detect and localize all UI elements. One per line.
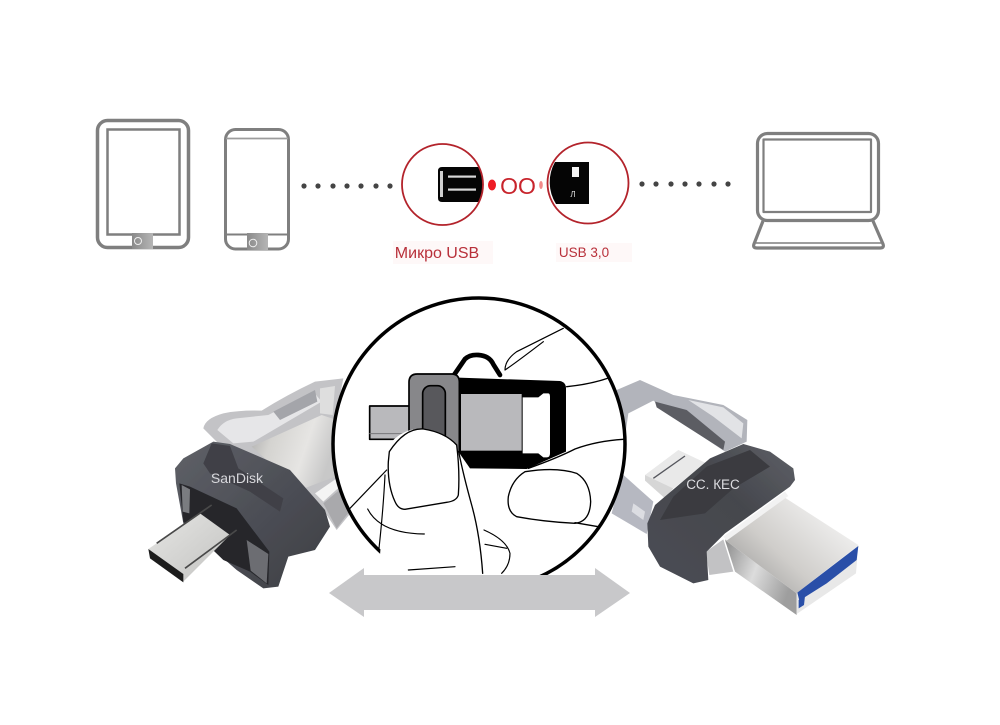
sliding loop	[454, 355, 500, 375]
micro USB connector	[148, 513, 230, 582]
grey slider cap	[409, 374, 459, 452]
transparent frame	[203, 378, 360, 530]
grey cap	[647, 444, 795, 583]
illustration: hand holding drive	[350, 328, 623, 575]
label: SS. KEC: СС. КЕС	[686, 477, 740, 492]
thumb	[380, 429, 418, 575]
thumb nail	[388, 429, 459, 509]
label: SanDisk: SanDisk	[211, 470, 264, 486]
icon: laptop	[754, 134, 883, 248]
micro USB connector	[645, 450, 707, 488]
icon: USB 3.0 port in circle	[548, 142, 628, 224]
black drive body	[458, 378, 566, 469]
neck	[706, 539, 733, 575]
silver plug	[461, 394, 522, 451]
icon: USB 3.0 port in circle: Л	[570, 190, 576, 199]
USB drive: left, micro USB end	[148, 378, 360, 588]
connector: red OO link: OO	[500, 173, 536, 199]
magnifier circle	[333, 298, 625, 590]
lower frame arm	[612, 473, 653, 534]
index finger	[528, 439, 623, 468]
label: USB 3.0	[556, 243, 632, 262]
upper frame rail	[615, 380, 747, 452]
front opening	[179, 483, 269, 585]
grey cap silhouette	[175, 442, 330, 588]
dark top panel	[203, 443, 283, 512]
second finger tip	[505, 328, 563, 370]
connector: red OO link	[488, 173, 543, 199]
label: micro USB	[393, 241, 493, 264]
micro connector	[370, 406, 411, 439]
silver plug side	[725, 540, 797, 615]
dark top panel	[660, 450, 770, 520]
USB blue opening	[797, 545, 858, 614]
finger nail	[508, 470, 591, 523]
icon: phone	[226, 130, 288, 250]
dotted line: right	[639, 181, 731, 187]
double arrow	[329, 568, 630, 617]
dotted line: left	[301, 183, 393, 189]
label: USB 3.0: USB 3,0	[559, 245, 609, 260]
silver plug top	[725, 497, 858, 593]
silver plug	[252, 415, 337, 490]
label: micro USB: Микро USB	[395, 245, 479, 262]
icon: micro USB port in circle	[402, 144, 483, 225]
icon: tablet	[98, 120, 188, 249]
USB drive: right, USB 3.0 end	[612, 380, 858, 615]
